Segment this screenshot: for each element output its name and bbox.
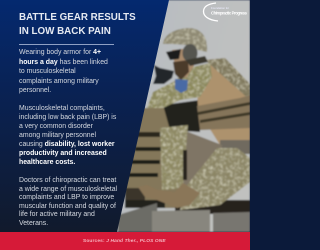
lower leg: [160, 125, 188, 190]
dark gap above steps: [175, 200, 250, 214]
title: BATTLE GEAR RESULTS: [19, 12, 136, 23]
back strap: [205, 58, 250, 100]
paragraph: complaints: causing disability, lost worker: [19, 141, 115, 148]
logo: Chiropractic Progress: [211, 10, 248, 16]
paragraph: complaints: Musculoskeletal complaints,: [19, 105, 105, 112]
helmet: [163, 28, 207, 52]
paragraph: body armor: to musculoskeletal: [19, 68, 76, 75]
source bar: Sources: J Hand Ther., PLOS ONE: [83, 238, 166, 244]
source bar: [0, 232, 250, 250]
paragraph: complaints: [19, 104, 116, 166]
stairs behind: [125, 108, 185, 208]
rifle: [153, 65, 174, 84]
photo background: soldier: [117, 0, 250, 232]
paragraph: complaints: healthcare costs.: [19, 159, 75, 166]
title: IN LOW BACK PAIN: [19, 26, 111, 36]
paragraph: chiropractic: Doctors of chiropractic can treat: [19, 177, 116, 184]
divider: [19, 44, 114, 45]
concrete steps: [118, 203, 158, 232]
dark under arm: [163, 100, 200, 132]
ear protection: [182, 44, 198, 62]
title: [19, 12, 136, 36]
logo: Foundation for: [211, 6, 229, 10]
paragraph: body armor: complaints among military: [19, 78, 99, 85]
boot: [138, 183, 200, 208]
thigh: [180, 148, 250, 210]
paragraph: complaints: among military personnel: [19, 132, 96, 139]
logo: [202, 2, 248, 22]
torso: [196, 62, 250, 145]
paragraph: complaints: including low back pain (LBP) is: [19, 114, 116, 121]
lower vest: [197, 95, 250, 130]
patch: [175, 79, 188, 93]
paragraph: body armor: hours a day has been linked: [19, 58, 108, 66]
gap behind leg: [183, 130, 222, 188]
paragraph: chiropractic: a wide range of musculoskeletal: [19, 186, 117, 193]
paragraph: chiropractic: complaints and LBP to improve: [19, 194, 114, 201]
sleeve: [147, 63, 212, 108]
face and beard: [172, 48, 194, 78]
paragraph: chiropractic: Veterans.: [19, 220, 48, 227]
paragraph: body armor: personnel.: [19, 87, 51, 94]
paragraph: body armor: [19, 48, 108, 94]
paragraph: chiropractic: [19, 176, 117, 227]
left panel: [0, 0, 169, 232]
paragraph: body armor: Wearing body armor for 4+: [19, 49, 101, 56]
paragraph: chiropractic: muscular function and quality of: [19, 203, 116, 210]
paragraph: chiropractic: life for active military and: [19, 211, 95, 218]
goggles: [166, 49, 181, 60]
paragraph: complaints: productivity and increased: [19, 150, 107, 157]
paragraph: complaints: a very common disorder: [19, 123, 93, 130]
